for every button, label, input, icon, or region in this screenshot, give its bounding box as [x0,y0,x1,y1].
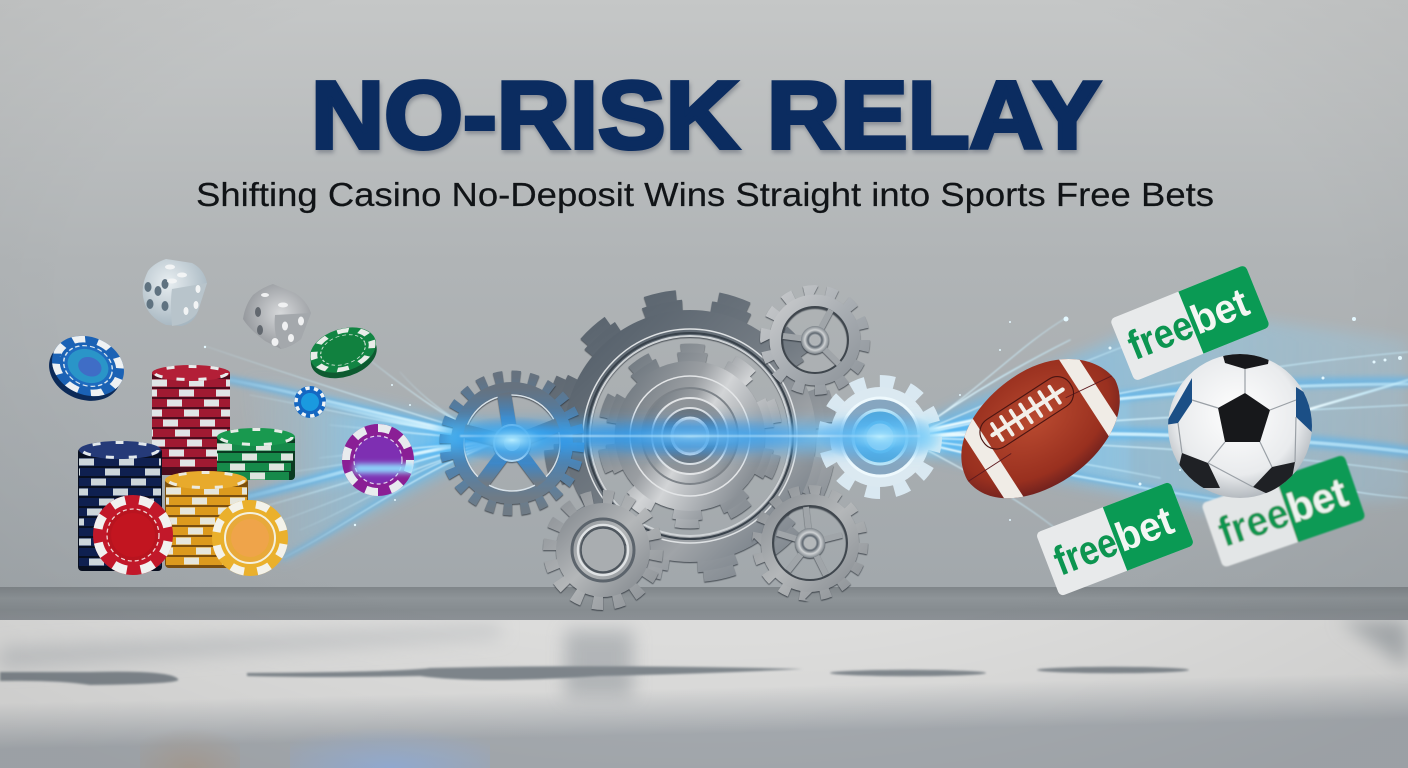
chip stack: red [152,365,230,475]
gear: left blue-lit [446,377,578,509]
chip stack: gold [165,471,248,568]
ticket: free bet, top [1110,265,1270,381]
football [961,359,1120,498]
inner gear [587,333,793,539]
subtitle: Shifting Casino No-Deposit Wins Straight into Sports Free Bets [196,176,1214,213]
background wall [0,0,1408,587]
ticket: free bet, rear blurred: bet [1281,468,1353,532]
chip stack: navy [78,441,162,571]
ticket: free bet, bottom [1036,481,1194,597]
chip: green floating [303,319,384,386]
ticket: free bet, rear blurred [1201,454,1366,568]
gear: top right [767,292,863,388]
title: NO-RISK RELAY [311,62,1101,169]
chip: purple [342,424,414,496]
chip: red front [92,494,174,576]
soccer ball [1165,352,1316,498]
central energy beam across gears [440,411,942,464]
energy beams: casino side [205,345,490,565]
gear: large central [526,272,854,600]
gear: right glowing [825,382,935,492]
chip: gold front [211,499,289,577]
ticket: free bet, bottom: free [1047,518,1124,584]
reflective floor [0,620,1408,768]
horizon band [0,587,1408,620]
ticket: free bet, top: free [1121,301,1200,369]
ticket: free bet, bottom: bet [1109,497,1180,561]
die: light blue [143,259,207,326]
die: silver [243,284,311,349]
chip stack: green [217,428,295,480]
gear: bottom right [759,492,861,594]
energy beams: sports side [910,310,1408,532]
chip: blue floating [40,325,133,412]
chip: small blue [294,386,326,418]
ticket: free bet, rear blurred: free [1212,488,1295,556]
light particles [204,316,1402,526]
gear: bottom left [550,497,656,603]
ticket: free bet, top: bet [1184,279,1255,343]
